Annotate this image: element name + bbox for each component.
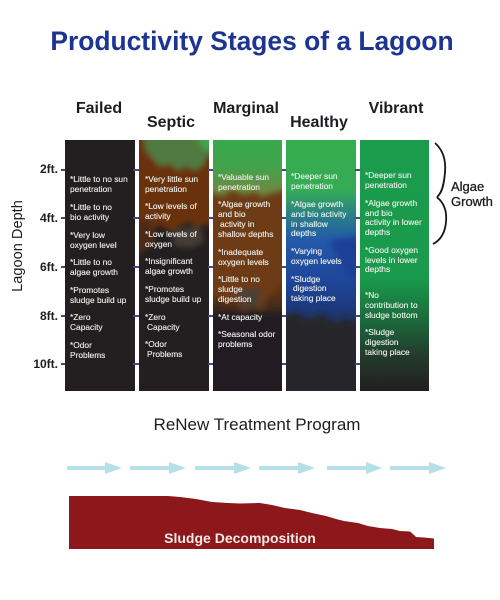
panel: failed: penetration (70, 184, 112, 194)
title: Productivity Stages of a Lagoon (50, 26, 454, 56)
panel: vibrant: *Good oxygen (365, 245, 418, 255)
panel: vibrant: depths (365, 227, 390, 237)
panel: vibrant: sludge bottom (365, 310, 418, 320)
depth tick marks (61, 169, 360, 365)
stage headings: Failed (76, 100, 122, 117)
panel: marginal: shallow depths (218, 229, 273, 239)
sludge decomposition shape (69, 496, 434, 549)
panel: healthy: digestion (293, 283, 327, 293)
panel: marginal: digestion (218, 294, 252, 304)
stage headings: Healthy (290, 114, 348, 131)
panel: septic: Problems (147, 349, 182, 359)
axis label: lagoon depth: Lagoon Depth (10, 200, 26, 292)
panel: failed: algae growth (70, 267, 118, 277)
panel: septic: *Insignificant (145, 256, 193, 266)
brace: algae growth range (433, 143, 446, 244)
panel: healthy: penetration (291, 181, 333, 191)
panel: septic: algae growth (145, 266, 193, 276)
panel: healthy: *Deeper sun (291, 171, 338, 181)
stage headings: Septic (147, 114, 195, 131)
panel: septic: *Promotes (145, 284, 184, 294)
panel: septic: *Very little sun (145, 174, 198, 184)
panel: septic: activity (145, 211, 171, 221)
depth scale labels: 10ft. (33, 357, 58, 371)
panel: healthy: taking place (291, 293, 336, 303)
panel: healthy: and bio activity (291, 209, 347, 219)
panel: failed: Capacity (70, 322, 103, 332)
panel: healthy: *Varying (291, 246, 322, 256)
panel: marginal (213, 140, 282, 391)
panel: vibrant: and bio (365, 208, 393, 218)
panel: failed: *Little to no sun (70, 174, 128, 184)
panel: marginal: oxygen levels (218, 257, 269, 267)
panel: marginal: penetration (218, 182, 260, 192)
panel: failed: *Zero (70, 312, 91, 322)
depth scale labels: 4ft. (40, 211, 58, 225)
stage headings: Marginal (213, 100, 279, 117)
panel: vibrant: penetration (365, 180, 407, 190)
panel: failed: *Promotes (70, 285, 109, 295)
panel: septic: *Low levels of (145, 229, 197, 239)
panel: marginal: sludge (218, 284, 243, 294)
panel: failed: *Very low (70, 230, 106, 240)
label: sludge decomposition: Sludge Decomposition (164, 530, 316, 546)
arrows: treatment progression (67, 462, 446, 474)
panel: septic: *Zero (145, 312, 166, 322)
panel: failed: *Little to no (70, 257, 112, 267)
panel: marginal: *Seasonal odor (218, 329, 275, 339)
label: algae growth: Growth (451, 194, 493, 209)
panel: vibrant: depths (365, 264, 390, 274)
panel: vibrant: contribution to (365, 300, 418, 310)
panel: vibrant: taking place (365, 347, 410, 357)
panel: healthy: in shallow (291, 219, 329, 229)
panel: marginal: and bio (218, 209, 246, 219)
depth scale labels: 6ft. (40, 260, 58, 274)
panel: septic: *Odor (145, 339, 167, 349)
depth scale labels: 2ft. (40, 162, 58, 176)
panel: septic: *Low levels of (145, 201, 197, 211)
panel: marginal: *Algae growth (218, 199, 270, 209)
panel: failed: sludge build up (70, 295, 127, 305)
panel: septic (139, 140, 209, 391)
depth scale labels: 8ft. (40, 309, 58, 323)
panel: failed: bio activity (70, 212, 110, 222)
panel: septic: oxygen (145, 239, 172, 249)
panel: vibrant: *Sludge (365, 327, 395, 337)
panel: marginal: problems (218, 339, 252, 349)
panel: vibrant: digestion (365, 337, 399, 347)
panel: marginal: *Little to no (218, 274, 260, 284)
panel: vibrant: activity in lower (365, 217, 422, 227)
panel: failed (65, 140, 135, 391)
panel: failed: Problems (70, 350, 105, 360)
panel: failed: *Odor (70, 340, 92, 350)
panel: failed: oxygen level (70, 240, 117, 250)
panel: septic: Capacity (147, 322, 180, 332)
panel: vibrant: levels in lower (365, 255, 418, 265)
panel: marginal: activity in (220, 219, 255, 229)
panel: marginal: *Inadequate (218, 247, 264, 257)
depth scale labels (33, 162, 58, 371)
panel: vibrant: *No (365, 290, 379, 300)
stage headings: Vibrant (369, 100, 424, 117)
panel: healthy: *Algae growth (291, 199, 343, 209)
panel: healthy: *Sludge (291, 274, 321, 284)
panel: failed: *Little to no (70, 202, 112, 212)
panel: vibrant (360, 140, 429, 391)
label: algae growth (451, 179, 493, 209)
panel: healthy: depths (291, 228, 316, 238)
label: algae growth: Algae (451, 179, 484, 194)
panel: vibrant: *Deeper sun (365, 170, 412, 180)
heading: renew treatment program: ReNew Treatment Program (154, 415, 360, 434)
panel: vibrant: *Algae growth (365, 198, 417, 208)
stage headings (76, 100, 424, 131)
panel: septic: penetration (145, 184, 187, 194)
panel: healthy: oxygen levels (291, 256, 342, 266)
panel: marginal: *At capacity (218, 312, 263, 322)
panel: septic: sludge build up (145, 294, 202, 304)
panel: healthy (286, 140, 356, 391)
panel: marginal: *Valuable sun (218, 172, 269, 182)
